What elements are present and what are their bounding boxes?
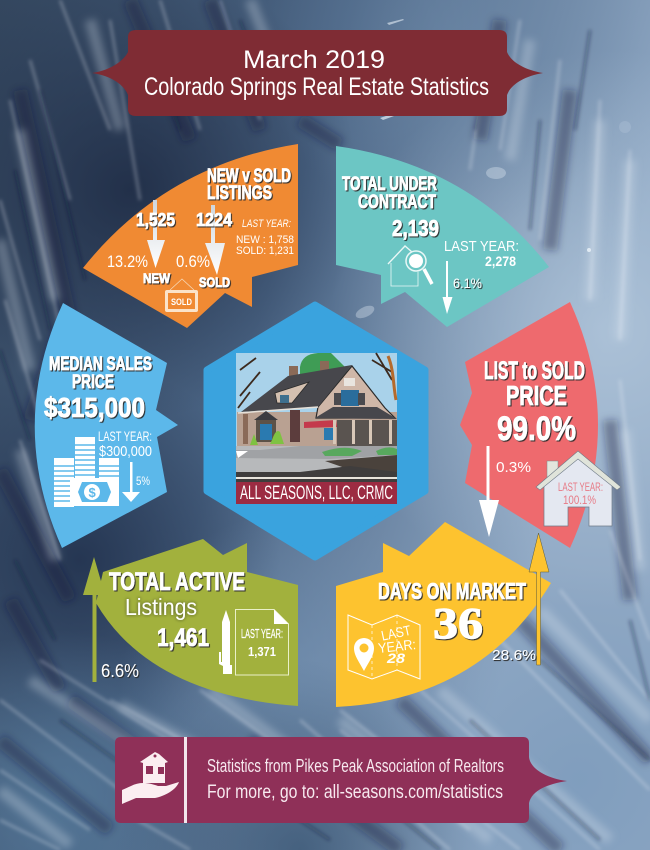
label: new: NEW	[143, 270, 171, 286]
stat: under contract: 2,139	[392, 215, 439, 241]
panel: median sales price	[35, 303, 178, 548]
stat: list to sold: 99.0%	[497, 410, 576, 448]
heading: median sales: MEDIAN SALES	[49, 354, 152, 375]
arrow: down	[479, 446, 499, 537]
icon: note last year: 1,371	[248, 644, 276, 659]
panel: list to sold price	[460, 302, 621, 548]
icon: house last year	[536, 451, 621, 526]
arrow: new listings down	[147, 200, 165, 268]
stat: active listings: 1,461	[157, 624, 209, 652]
title text: subject: Colorado Springs Real Estate Statistics	[144, 73, 489, 101]
change: 6.6%	[101, 661, 139, 681]
change: 5%	[136, 474, 150, 488]
heading: listings: LISTINGS	[207, 183, 272, 204]
last year value: 2,278	[485, 253, 516, 269]
heading: contract: CONTRACT	[358, 192, 436, 213]
source text: Statistics from Pikes Peak Association of Realtors	[207, 756, 504, 776]
icon: house last year: LAST YEAR:	[558, 480, 603, 494]
heading: price: PRICE	[506, 380, 567, 411]
footer ribbon	[115, 737, 567, 823]
last year label: LAST YEAR:	[242, 218, 291, 230]
icon: map last year: 28	[386, 650, 405, 666]
panel: days on market	[336, 522, 551, 707]
icon: house last year: 100.1%	[563, 493, 596, 507]
icon: pen	[219, 610, 232, 674]
heading: list to sold: LIST to SOLD	[484, 357, 585, 385]
icon: house in hand	[122, 752, 179, 804]
icon: coins and banknote: $	[88, 485, 96, 500]
last year label: LAST YEAR:	[444, 238, 519, 255]
panel: central hexagon with house logo	[207, 305, 425, 557]
logo banner	[236, 482, 397, 504]
arrow: up	[83, 557, 105, 682]
change: 28.6%	[492, 647, 536, 664]
change: 6.1%	[453, 275, 482, 291]
link text: For more, go to: all-seasons.com/statistics	[207, 782, 503, 803]
change: 0.3%	[496, 459, 531, 476]
heading: total active: TOTAL ACTIVE	[109, 568, 245, 596]
icon: map last year	[348, 615, 420, 679]
icon: map last year: YEAR:	[377, 636, 417, 656]
stat: sold listings: 1224	[196, 210, 232, 230]
panel: total under contract	[336, 146, 549, 327]
arrow: up	[529, 533, 549, 665]
arrow: down	[122, 462, 140, 502]
panel: total active listings	[83, 539, 298, 706]
heading: days on market: DAYS ON MARKET	[378, 578, 526, 604]
last year new: NEW : 1,758	[236, 234, 294, 246]
label: sold: SOLD	[199, 274, 230, 290]
heading: total under: TOTAL UNDER	[342, 174, 437, 195]
change: new: 13.2%	[107, 252, 148, 271]
icon: map last year: LAST	[380, 622, 413, 644]
icon: sold sign: SOLD	[171, 297, 192, 307]
last year value: $300,000	[99, 443, 152, 460]
heading: price: PRICE	[72, 372, 114, 393]
arrow: sold listings down	[205, 205, 225, 275]
title text: month: March 2019	[243, 46, 385, 74]
house illustration	[236, 353, 397, 482]
title ribbon	[92, 30, 543, 116]
change: sold: 0.6%	[176, 252, 210, 271]
icon: house with magnifier	[388, 246, 432, 286]
icon: note last year	[236, 610, 288, 675]
stat: median price: $315,000	[44, 392, 145, 423]
heading: new v sold: NEW v SOLD	[207, 166, 291, 187]
icon: coins and banknote	[54, 437, 119, 507]
arrow: down	[442, 261, 452, 314]
last year sold: SOLD: 1,231	[236, 245, 294, 257]
icon: note last year: LAST YEAR:	[241, 626, 283, 641]
label: listings: Listings	[125, 594, 197, 620]
stat: days: 36	[433, 599, 483, 648]
logo banner: ALL SEASONS, LLC, CRMC	[240, 483, 393, 504]
panel: new v sold listings	[83, 144, 298, 328]
stat: new listings: 1,525	[136, 210, 175, 230]
icon: sold sign	[165, 279, 198, 312]
last year label: LAST YEAR:	[98, 428, 152, 444]
